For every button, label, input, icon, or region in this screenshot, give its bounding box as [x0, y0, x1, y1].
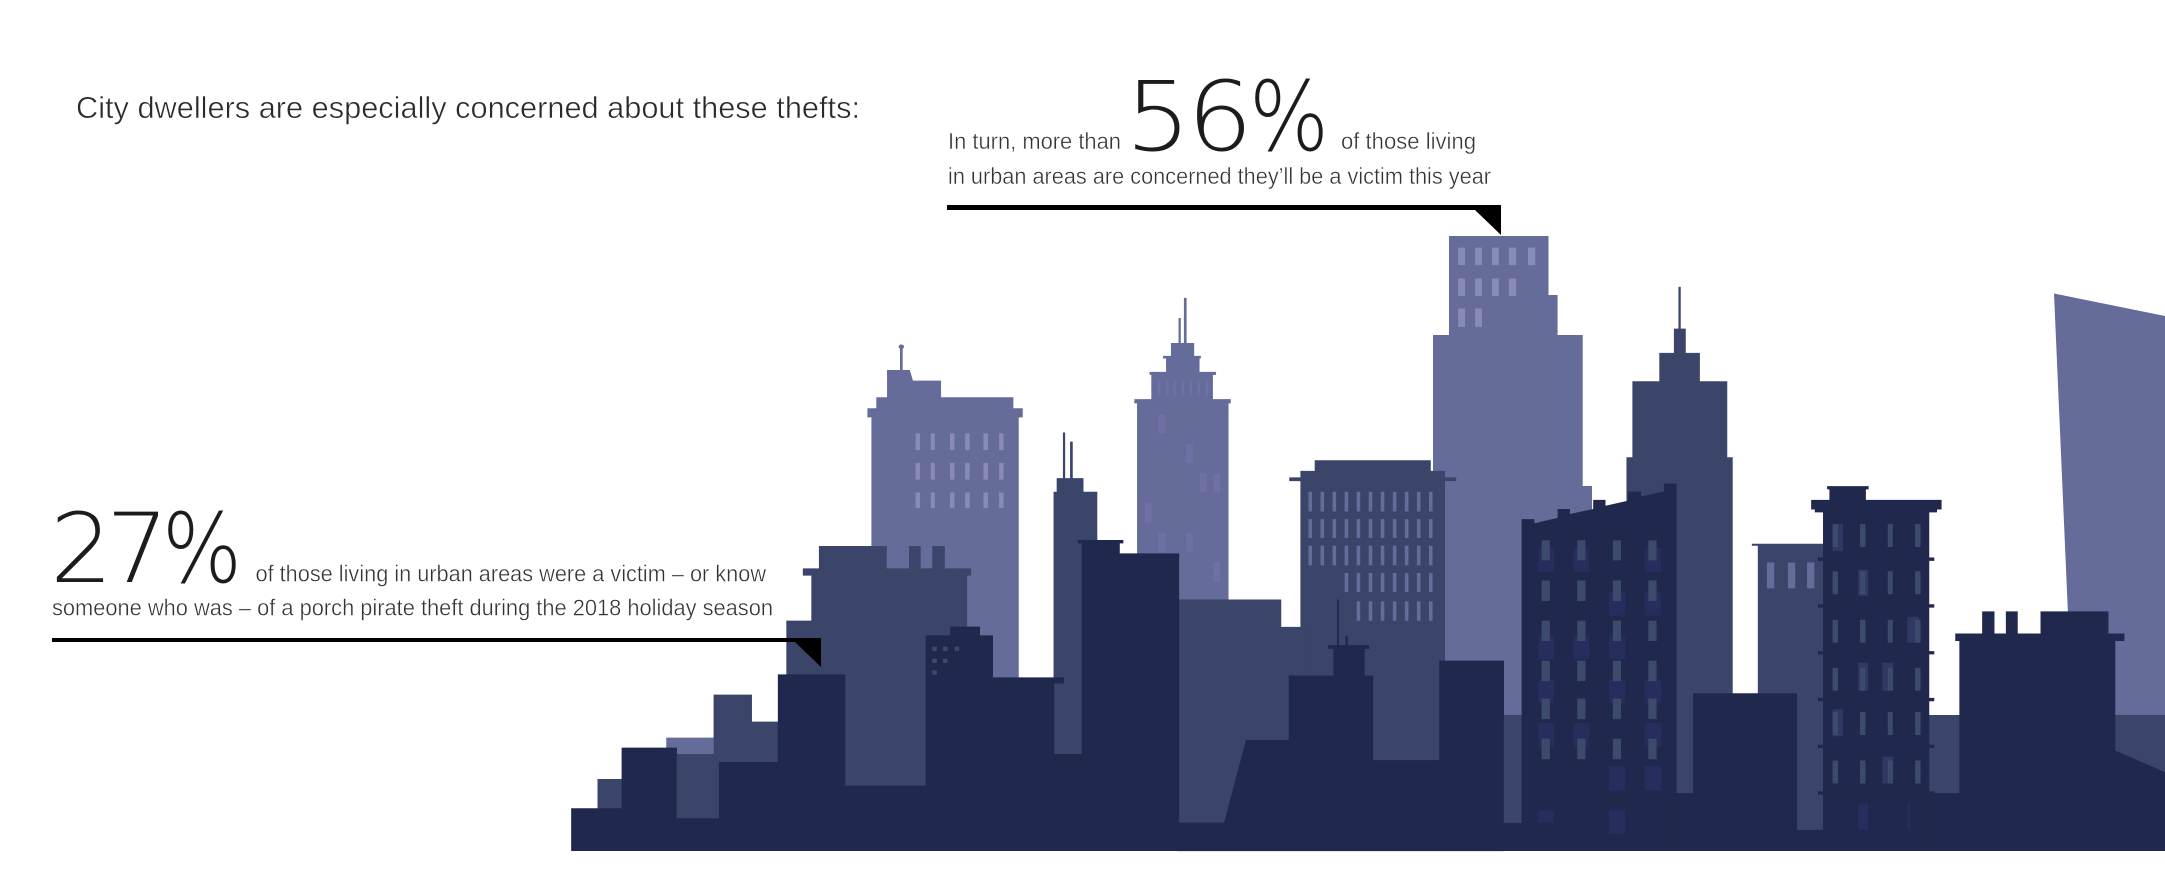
building: mid-tone lower block: [1171, 600, 1304, 826]
stat: 27%: 7: [106, 493, 169, 605]
building: far left light tower: [867, 345, 1023, 697]
text: of those living: of those living: [1341, 128, 1476, 154]
skyline illustration: [571, 236, 2165, 851]
stat: 56%: 5: [1125, 61, 1191, 173]
building: mid-tone windowed office block: [1289, 460, 1456, 762]
stat: 27%: %: [162, 493, 242, 605]
building: dark left foreground stepped blocks: [571, 540, 1179, 851]
building: dark narrow tower with ledges: [1811, 486, 1942, 851]
building: dark right block with chimneys: [1924, 611, 2165, 851]
ground strip: [572, 830, 2165, 851]
building: dark plain block: [1673, 693, 1828, 851]
text: second line: someone who was – of a porch pirate theft during the 2018 holiday season: [52, 594, 773, 620]
building: tall central light tower: [1433, 236, 1592, 720]
building: dark low joining block: [1500, 823, 1530, 851]
stat: 56%: 6: [1187, 61, 1253, 173]
building: light spire tower: [1134, 298, 1231, 622]
building: mid-tone thin tower with antennas: [1054, 433, 1097, 753]
building: right edge light slab: [2054, 294, 2165, 720]
text: urban concern line: in urban areas are concerned they’ll be a victim this year: [948, 163, 1491, 189]
building: mid-tone right spire tower: [1626, 287, 1733, 805]
building: dark central foreground with rooftop antennas: [1177, 600, 1504, 851]
building: dark sloped-roof apartment with windows: [1522, 484, 1677, 851]
text: lead-in: In turn, more than: [948, 128, 1121, 154]
stat: 56%: %: [1249, 61, 1329, 173]
pointer line to tower: [947, 205, 1501, 235]
building: mid-tone block with three windows: [1752, 544, 1828, 834]
mid-tone band behind right side: [1504, 715, 2165, 851]
callout: 27 percent: [50, 493, 821, 667]
text: first line: of those living in urban areas were a victim – or know: [256, 560, 766, 586]
stat: 27%: 2: [50, 493, 113, 605]
heading: city dwellers: City dwellers are especially concerned about these thefts:: [76, 90, 860, 125]
building: mid-tone large left building with chimneys: [786, 546, 971, 787]
callout: 56 percent: [947, 61, 1501, 235]
pointer line to building: [52, 638, 821, 667]
building: mid-tone small left steps: [597, 695, 781, 820]
